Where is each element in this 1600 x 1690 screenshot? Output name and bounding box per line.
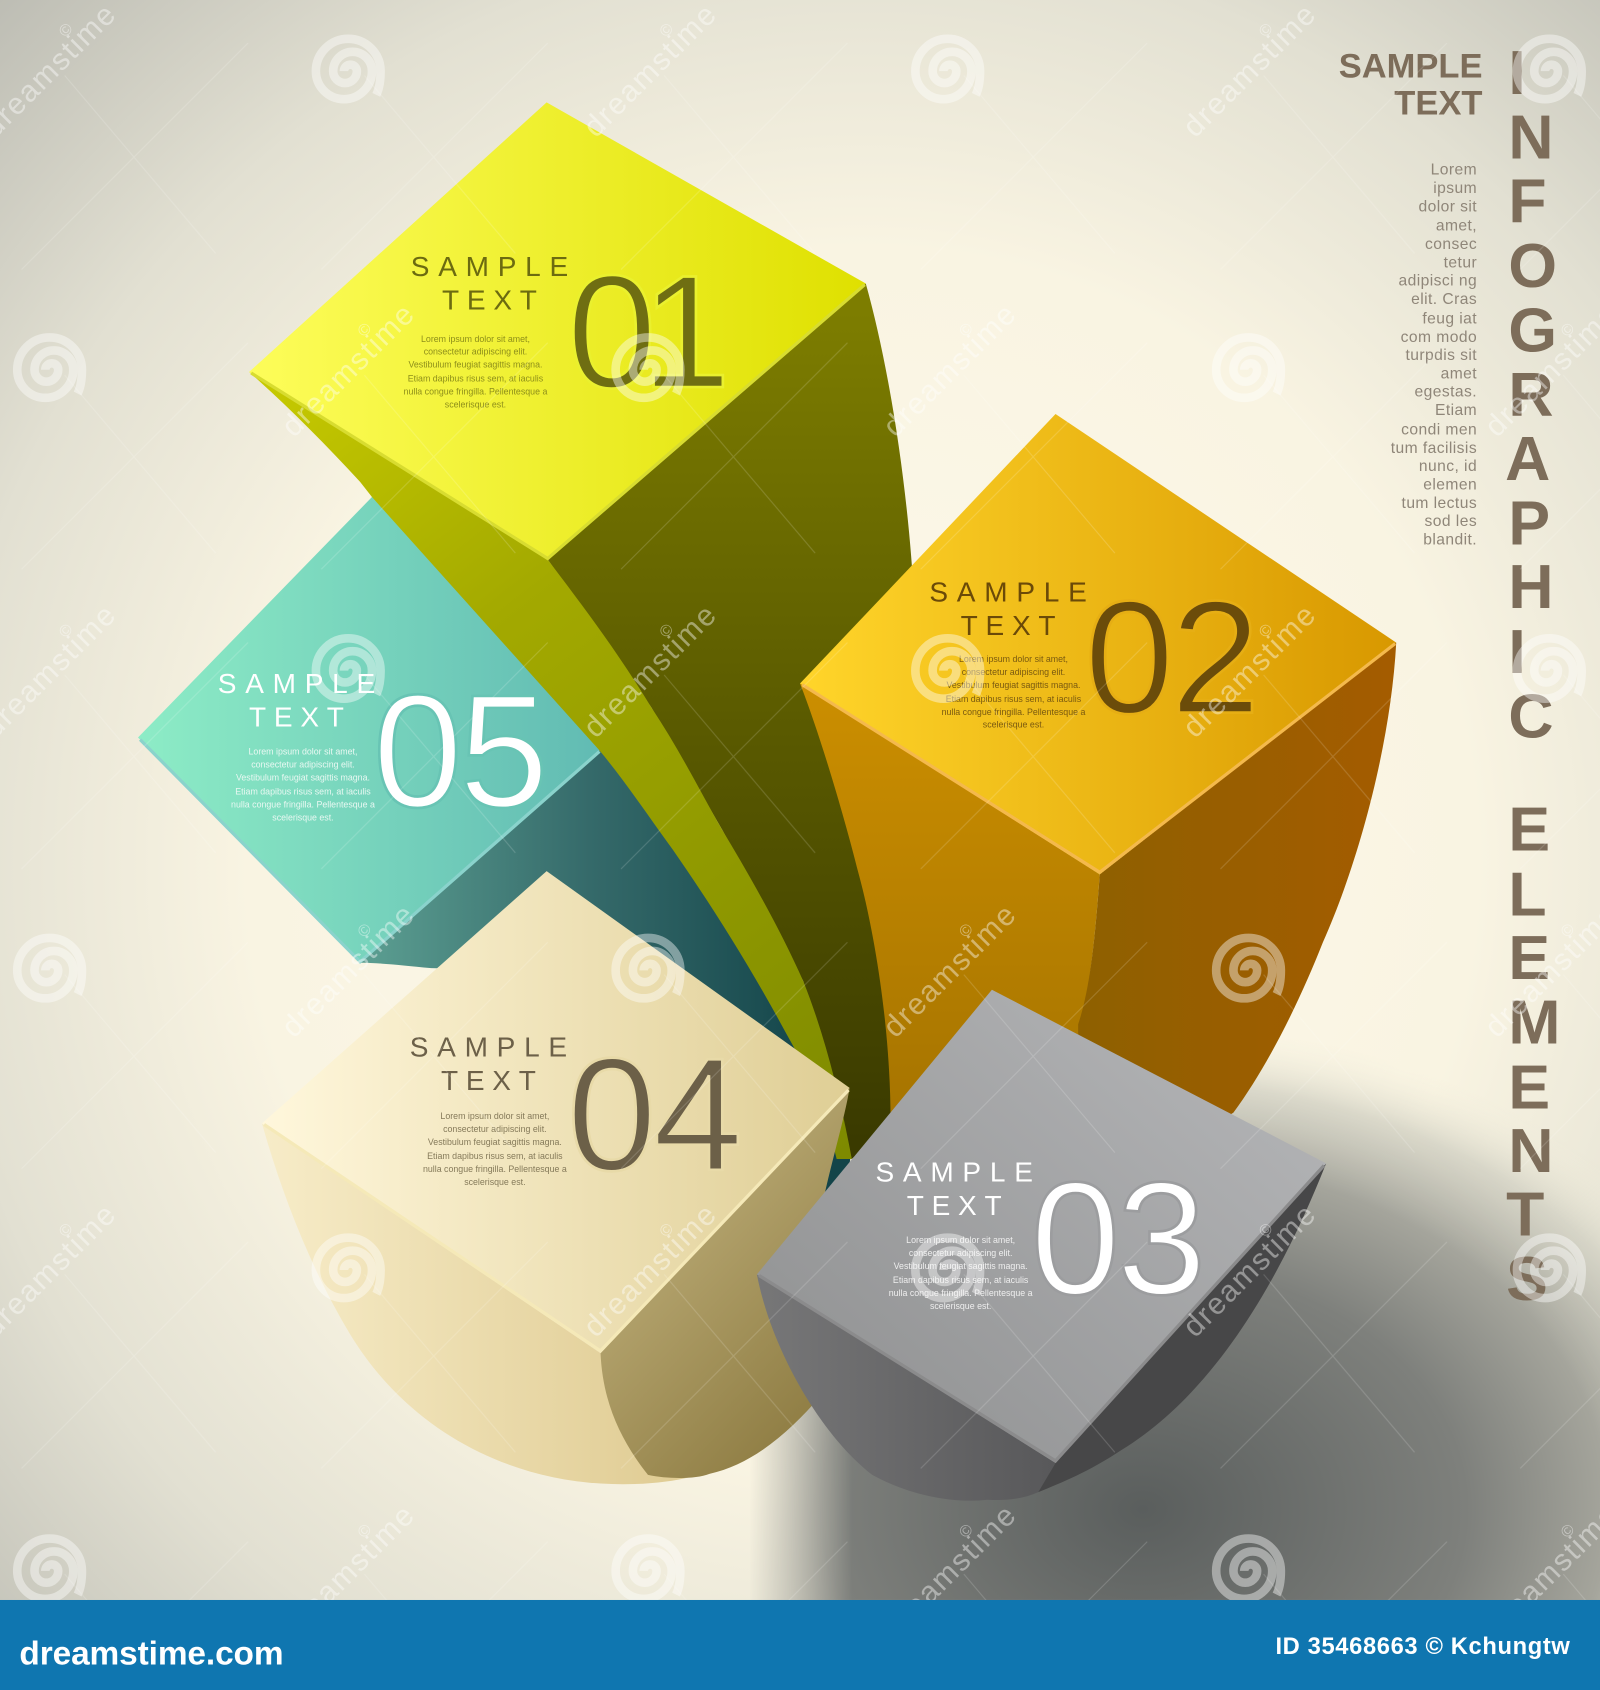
footer banner: [0, 1600, 1600, 1690]
watermark text: ©: [1557, 920, 1578, 941]
body 05: Lorem ipsum dolor sit amet,: [249, 747, 357, 757]
cube 03 left face: [757, 1274, 1056, 1501]
body 03: Lorem ipsum dolor sit amet,: [906, 1235, 1015, 1245]
vertical title: E: [1508, 923, 1550, 993]
watermark text: ©: [956, 319, 977, 341]
cube 05 teal: [138, 497, 852, 1197]
heading 01: SAMPLE: [411, 251, 568, 282]
heading 01: TEXT: [442, 284, 537, 315]
heading 03: TEXT: [907, 1190, 1002, 1221]
number 01: 01: [567, 243, 723, 422]
right body text: amet,: [1436, 218, 1477, 235]
right body text: tum lectus: [1402, 495, 1477, 512]
cube 03 grey: [757, 990, 1326, 1501]
label 02: [929, 569, 1257, 748]
cube 02 orange: [800, 414, 1396, 1143]
label 03: [875, 1150, 1203, 1329]
body 03: Vestibulum feugiat sagittis magna.: [894, 1261, 1028, 1271]
heading 03: SAMPLE: [875, 1157, 1033, 1188]
watermark text: dreamstime: [275, 899, 421, 1044]
right body text: sod les: [1425, 513, 1477, 530]
vertical title: N: [1508, 1116, 1554, 1186]
body 04: Lorem ipsum dolor sit amet,: [440, 1111, 549, 1121]
cube 04 top face: [262, 871, 850, 1353]
right body text: com modo: [1401, 329, 1477, 346]
body 02: nulla congue fringilla. Pellentesque a: [942, 707, 1085, 717]
label 05: [218, 662, 545, 841]
vertical title: I: [1508, 617, 1526, 687]
watermark text: dreamstime: [577, 599, 723, 744]
watermark text: dreamstime: [877, 899, 1022, 1044]
body 05: Etiam dapibus risus sem, at iaculis: [235, 787, 371, 797]
watermark text: ©: [956, 920, 977, 941]
floor shadow: [744, 1024, 1600, 1600]
body 04: scelerisque est.: [464, 1177, 526, 1187]
body 04: consectetur adipiscing elit.: [443, 1124, 547, 1134]
body 04: nulla congue fringilla. Pellentesque a: [423, 1164, 567, 1174]
cube 01 left face: [249, 372, 852, 1159]
label 01: [404, 243, 723, 422]
vertical title: T: [1506, 1180, 1544, 1250]
vertical title: S: [1506, 1244, 1548, 1314]
watermark text: ©: [55, 620, 77, 641]
watermark text: ©: [354, 1520, 375, 1542]
vertical title: R: [1508, 360, 1554, 430]
watermark text: ©: [1255, 20, 1277, 41]
watermark text: ©: [656, 20, 677, 41]
right body text: tum facilisis: [1391, 440, 1477, 457]
body 01: consectetur adipiscing elit.: [424, 347, 527, 357]
cube 03 right face: [1038, 1163, 1326, 1492]
number 05: 05: [373, 662, 545, 841]
body 02: Etiam dapibus risus sem, at iaculis: [946, 694, 1082, 704]
watermark text: ©: [656, 620, 677, 641]
vertical title: E: [1508, 1052, 1550, 1122]
cube 05 top face: [138, 497, 647, 963]
heading 02: SAMPLE: [929, 577, 1087, 608]
watermark text: dreamstime: [577, 0, 723, 144]
right body text: egestas.: [1415, 384, 1477, 401]
right body text: tetur: [1444, 254, 1477, 271]
body 05: nulla congue fringilla. Pellentesque a: [231, 800, 375, 810]
body 02: scelerisque est.: [983, 720, 1044, 730]
watermark text: dreamstime: [1177, 1198, 1322, 1344]
heading 02: TEXT: [961, 610, 1056, 641]
cube 02 left face: [800, 684, 1100, 1121]
body 03: scelerisque est.: [930, 1301, 991, 1311]
body 01: scelerisque est.: [445, 400, 506, 410]
watermark text: ©: [1557, 1520, 1578, 1542]
heading 05: TEXT: [249, 702, 344, 733]
watermark text: dreamstime: [275, 1499, 421, 1644]
body 02: consectetur adipiscing elit.: [962, 667, 1065, 677]
body 03: nulla congue fringilla. Pellentesque a: [889, 1288, 1033, 1298]
body 04: Vestibulum feugiat sagittis magna.: [428, 1137, 562, 1147]
watermark text: dreamstime: [877, 298, 1022, 443]
watermark text: dreamstime: [275, 298, 421, 443]
cube 02 right face: [1078, 643, 1396, 1143]
number 02: 02: [1085, 569, 1257, 748]
body 01: Vestibulum feugiat sagittis magna.: [408, 360, 542, 370]
body 04: Etiam dapibus risus sem, at iaculis: [427, 1151, 563, 1161]
cube 03 top face: [757, 990, 1326, 1463]
right heading: SAMPLE: [1339, 48, 1482, 86]
vertical title: N: [1508, 102, 1554, 172]
heading 04: TEXT: [441, 1065, 536, 1096]
right body text: amet: [1441, 365, 1477, 382]
watermark text: ©: [354, 319, 375, 341]
number 04: 04: [567, 1026, 739, 1205]
right body text: ipsum: [1433, 180, 1477, 197]
vertical title: A: [1505, 424, 1550, 494]
vertical title: G: [1508, 295, 1557, 365]
right body text: nunc, id: [1419, 458, 1477, 475]
vertical title: O: [1508, 231, 1557, 301]
right body text: blandit.: [1423, 531, 1477, 548]
watermark text: ©: [656, 1220, 677, 1241]
body 03: Etiam dapibus risus sem, at iaculis: [893, 1275, 1029, 1285]
body 01: Lorem ipsum dolor sit amet,: [421, 334, 530, 344]
body 05: consectetur adipiscing elit.: [251, 760, 355, 770]
watermark text: ©: [1255, 620, 1277, 641]
number 03: 03: [1031, 1150, 1203, 1329]
vertical title: C: [1508, 681, 1554, 751]
vertical title: F: [1508, 166, 1547, 236]
cube 04 cream: [262, 871, 852, 1484]
cube 02 top face: [800, 414, 1396, 874]
body 01: Etiam dapibus risus sem, at iaculis: [408, 374, 544, 384]
vertical title: M: [1508, 988, 1560, 1058]
body 01: nulla congue fringilla. Pellentesque a: [404, 387, 547, 397]
watermark text: ©: [956, 1520, 977, 1542]
right body text: elemen: [1423, 476, 1477, 493]
watermark text: ©: [1557, 319, 1578, 341]
banner credit: ID 35468663 © Kchungtw: [1275, 1634, 1570, 1660]
right body text: elit. Cras: [1411, 291, 1477, 308]
right body text: dolor sit: [1418, 198, 1477, 215]
watermark text: ©: [1255, 1220, 1277, 1241]
cube 04 right face: [601, 1088, 852, 1478]
watermark text: ©: [55, 20, 77, 41]
heading 04: SAMPLE: [410, 1032, 567, 1063]
body 05: Vestibulum feugiat sagittis magna.: [236, 773, 370, 783]
vertical title: H: [1508, 552, 1554, 622]
watermark text: dreamstime: [1177, 0, 1322, 144]
cube 01 top face: [249, 102, 866, 560]
vertical title: I: [1508, 38, 1526, 108]
right body text: adipisci ng: [1399, 273, 1477, 290]
right body text: Lorem: [1431, 162, 1477, 179]
vertical title: E: [1508, 795, 1550, 865]
cube 01 yellow: [249, 102, 914, 1159]
cube 05 side face: [360, 750, 852, 1197]
watermark text: dreamstime: [877, 1499, 1022, 1644]
right body text: consec: [1425, 236, 1477, 253]
banner logo: dreamstime.com: [19, 1636, 284, 1673]
vertical title: L: [1508, 859, 1547, 929]
body 02: Vestibulum feugiat sagittis magna.: [946, 680, 1080, 690]
watermark text: ©: [55, 1220, 77, 1241]
watermark text: ©: [354, 920, 375, 941]
body 03: consectetur adipiscing elit.: [909, 1248, 1012, 1258]
watermark text: dreamstime: [577, 1198, 723, 1344]
right body text: turpdis sit: [1405, 347, 1477, 364]
right body text: feug iat: [1422, 310, 1477, 327]
right body text: condi men: [1401, 421, 1477, 438]
cube 01 right face: [548, 284, 914, 1159]
heading 05: SAMPLE: [218, 668, 375, 699]
right body text: Etiam: [1435, 402, 1477, 419]
watermark text: dreamstime: [1177, 599, 1322, 744]
right heading: TEXT: [1394, 84, 1482, 122]
body 02: Lorem ipsum dolor sit amet,: [959, 654, 1068, 664]
cube 04 left face: [262, 1123, 690, 1484]
body 05: scelerisque est.: [272, 812, 334, 822]
label 04: [410, 1026, 739, 1205]
vertical title: P: [1508, 488, 1550, 558]
